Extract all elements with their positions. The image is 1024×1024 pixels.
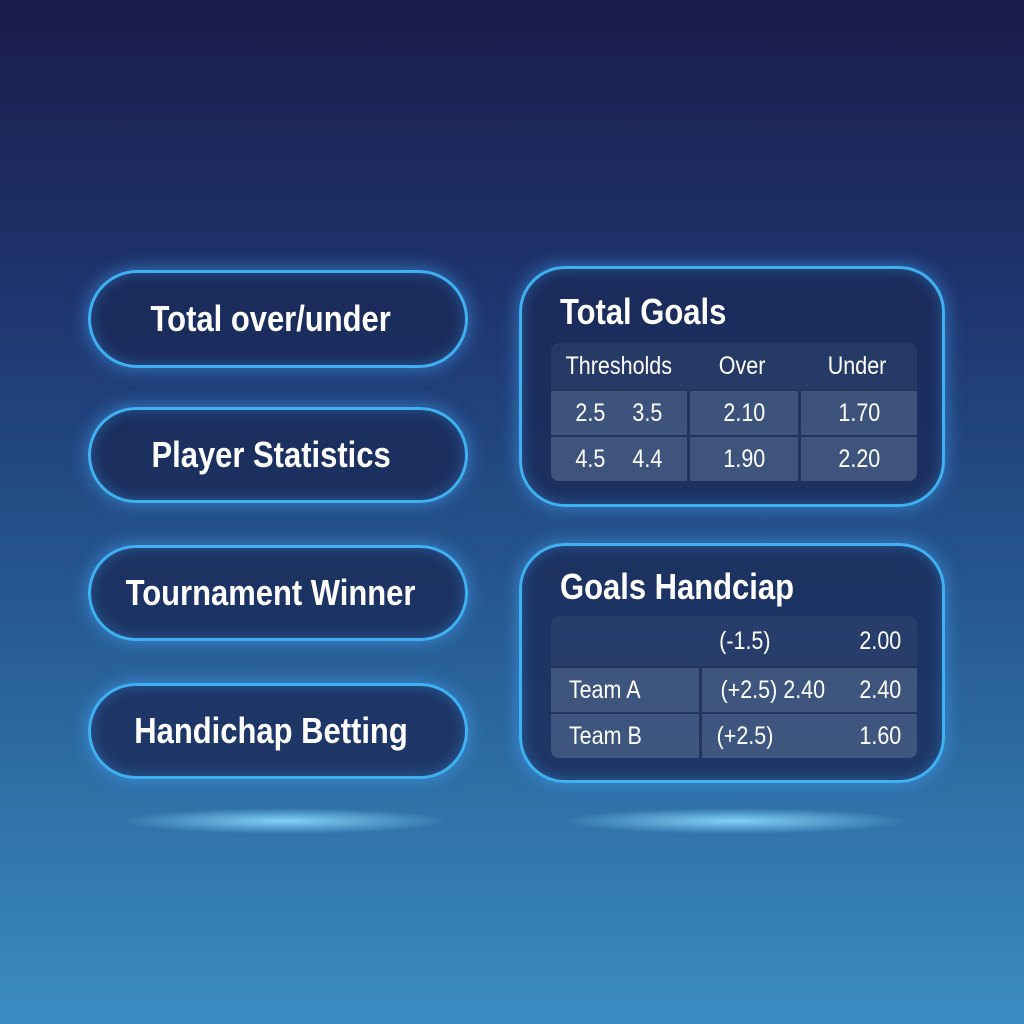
pill: Player Statistics [88, 407, 468, 503]
panel: Total Goals [519, 266, 945, 507]
table: total goals [551, 343, 917, 481]
table: handicap: 1.60 [860, 722, 902, 750]
table: total goals: 1.70 [838, 398, 880, 426]
table: handicap: Team A [569, 676, 641, 704]
pill: Player Statistics: Player Statistics [151, 434, 391, 475]
table: handicap: (+2.5) [717, 722, 773, 750]
table: total goals: 2.5 [576, 398, 606, 426]
table: handicap: 2.40 [860, 676, 902, 704]
table: handicap: 2.00 [860, 626, 902, 654]
table: total goals: 1.90 [723, 444, 765, 472]
table: handicap: Team B [569, 722, 642, 750]
table: total goals: 4.5 [576, 444, 606, 472]
table: total goals: 3.5 [632, 398, 662, 426]
pill: Handichap Betting [88, 683, 468, 779]
table: total goals: 2.10 [723, 398, 765, 426]
heading: Total Goals: Total Goals [560, 291, 726, 332]
pill: Total over/under: Total over/under [151, 298, 391, 339]
heading: Goals Handciap: Goals Handciap [560, 566, 794, 607]
pill: Handichap Betting: Handichap Betting [134, 710, 408, 751]
table: handicap: (+2.5) 2.40 [721, 676, 825, 704]
table: total goals: Over [719, 352, 766, 380]
table: total goals: Under [828, 352, 887, 380]
panel: Goals Handicap [519, 543, 945, 783]
pill: Total over/under [88, 270, 468, 368]
table: handicap [551, 616, 917, 758]
pill: Tournament Winner [88, 545, 468, 641]
table: handicap: (-1.5) [719, 626, 771, 654]
table: total goals: 2.20 [838, 444, 880, 472]
table: total goals: 4.4 [632, 444, 662, 472]
pill: Tournament Winner: Tournament Winner [126, 572, 416, 613]
table: total goals: Thresholds [566, 352, 672, 380]
